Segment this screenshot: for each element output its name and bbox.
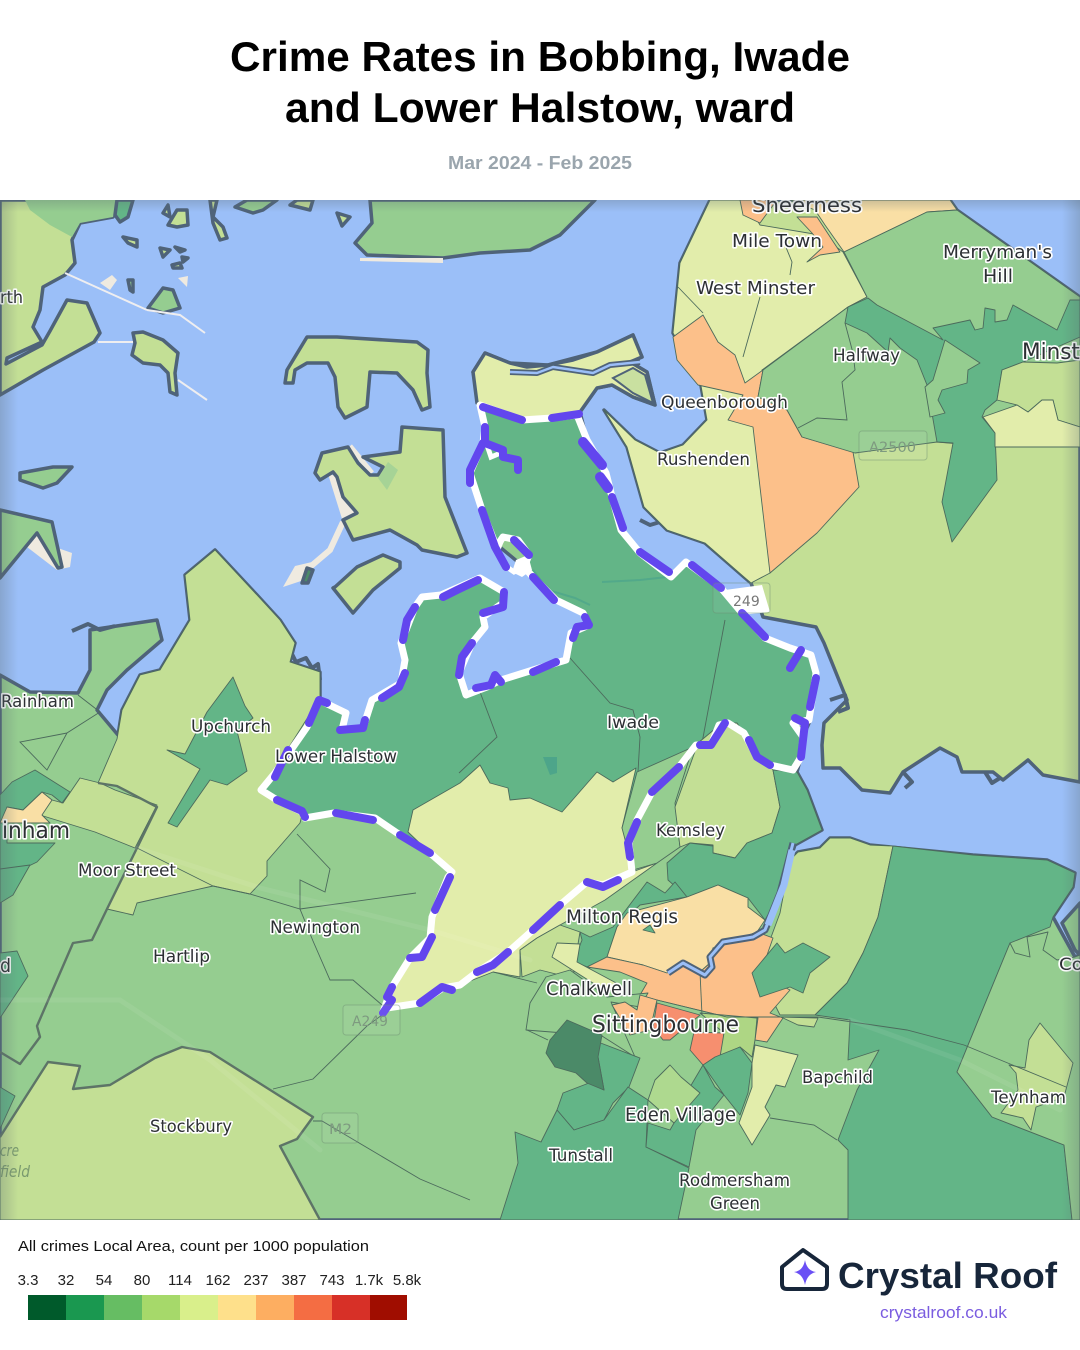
legend value labels: 32 <box>58 1272 74 1289</box>
legend value labels: 5.8k <box>393 1272 422 1289</box>
road shield A2500: A2500 <box>869 440 916 456</box>
place labels: cre <box>0 1141 19 1160</box>
Milton Creek <box>668 843 793 975</box>
logo: Crystal Roof <box>782 1250 1058 1322</box>
website link: crystalroof.co.uk <box>880 1304 1008 1322</box>
place labels: Teynham <box>990 1088 1066 1108</box>
channel <box>510 362 640 373</box>
north Sheppey tip above ward <box>473 335 655 422</box>
mainland east tip <box>1062 903 1080 955</box>
bridge patch <box>725 585 770 615</box>
title: Crime Rates in Bobbing, Iwade <box>230 33 850 80</box>
place labels: Green <box>710 1194 760 1214</box>
place labels: Rainham <box>1 692 74 712</box>
place labels: Moor Street <box>78 861 176 881</box>
ward boundary purple dashes <box>275 407 816 1013</box>
faint roads <box>0 848 1060 1150</box>
offshore islands <box>0 200 595 613</box>
road shield M2: M2 <box>329 1122 352 1138</box>
legend value labels: 387 <box>281 1272 307 1289</box>
road shield A249 south <box>343 1005 400 1035</box>
choropleth map <box>0 193 1080 1220</box>
road shield A249 north <box>713 583 770 613</box>
title: and Lower Halstow, ward <box>285 84 795 131</box>
legend value labels: 162 <box>205 1272 231 1289</box>
place labels: Mile Town <box>732 231 822 252</box>
place labels: Halfway <box>833 346 900 366</box>
place labels: Iwade <box>607 713 659 733</box>
place labels: Chalkwell <box>546 978 632 1000</box>
place labels: Sittingbourne <box>592 1012 739 1038</box>
icon: house with star <box>782 1250 827 1289</box>
road shield M2 <box>322 1113 358 1143</box>
place labels: Lower Halstow <box>275 747 397 767</box>
ward fill <box>266 412 812 840</box>
road shield A2500 <box>859 431 927 460</box>
place labels: Merryman's <box>943 242 1052 263</box>
zones: south of ward <box>383 723 1080 1220</box>
Isle of Sheppey base <box>604 200 1080 793</box>
legend value labels: 1.7k <box>355 1272 384 1289</box>
place labels: Bapchild <box>802 1068 873 1088</box>
ward boundary white outline <box>261 405 816 1012</box>
place labels: Queenborough <box>661 393 788 413</box>
place labels: d <box>0 955 11 977</box>
mainland base <box>0 335 1080 1220</box>
zones: Sheppey <box>604 200 1080 583</box>
date range subtitle: Mar 2024 - Feb 2025 <box>448 153 632 173</box>
legend colour scale <box>28 1295 407 1320</box>
place labels: Eden Village <box>625 1104 736 1126</box>
legend value labels <box>18 1272 422 1289</box>
place labels: Newington <box>270 918 360 938</box>
place labels: rth <box>0 288 23 308</box>
title <box>230 33 850 131</box>
place labels: Hill <box>983 266 1013 287</box>
legend value labels: 80 <box>134 1272 150 1289</box>
legend <box>18 1238 422 1320</box>
place labels: inham <box>2 818 70 844</box>
road shield A249 north: 249 <box>733 594 760 610</box>
place labels: Sheerness <box>752 193 862 217</box>
place labels: Kemsley <box>656 821 725 841</box>
place labels: Hartlip <box>153 947 210 967</box>
legend value labels: 54 <box>96 1272 112 1289</box>
place labels: Milton Regis <box>566 906 678 928</box>
place labels: Rushenden <box>657 450 750 470</box>
logo wordmark: Crystal Roof <box>838 1255 1058 1296</box>
ward internal boundaries and rivers <box>459 570 725 775</box>
place labels: Upchurch <box>191 717 271 737</box>
ward inner loops <box>487 445 532 577</box>
legend value labels: 3.3 <box>18 1272 38 1289</box>
place labels: Tunstall <box>548 1146 613 1166</box>
place labels: field <box>0 1162 31 1181</box>
place labels: Stockbury <box>150 1117 232 1137</box>
road shield A249 south: A249 <box>352 1014 388 1030</box>
marsh inset <box>613 368 653 403</box>
legend title: All crimes Local Area, count per 1000 population <box>18 1238 369 1255</box>
legend value labels: 237 <box>243 1272 269 1289</box>
legend value labels: 114 <box>168 1272 192 1289</box>
place labels: West Minster <box>696 278 816 299</box>
place labels: Rodmersham <box>679 1171 790 1191</box>
zones: mainland west <box>0 550 320 1220</box>
coastal crinkles <box>72 520 1000 788</box>
legend value labels: 743 <box>319 1272 345 1289</box>
place labels <box>0 193 1080 1214</box>
